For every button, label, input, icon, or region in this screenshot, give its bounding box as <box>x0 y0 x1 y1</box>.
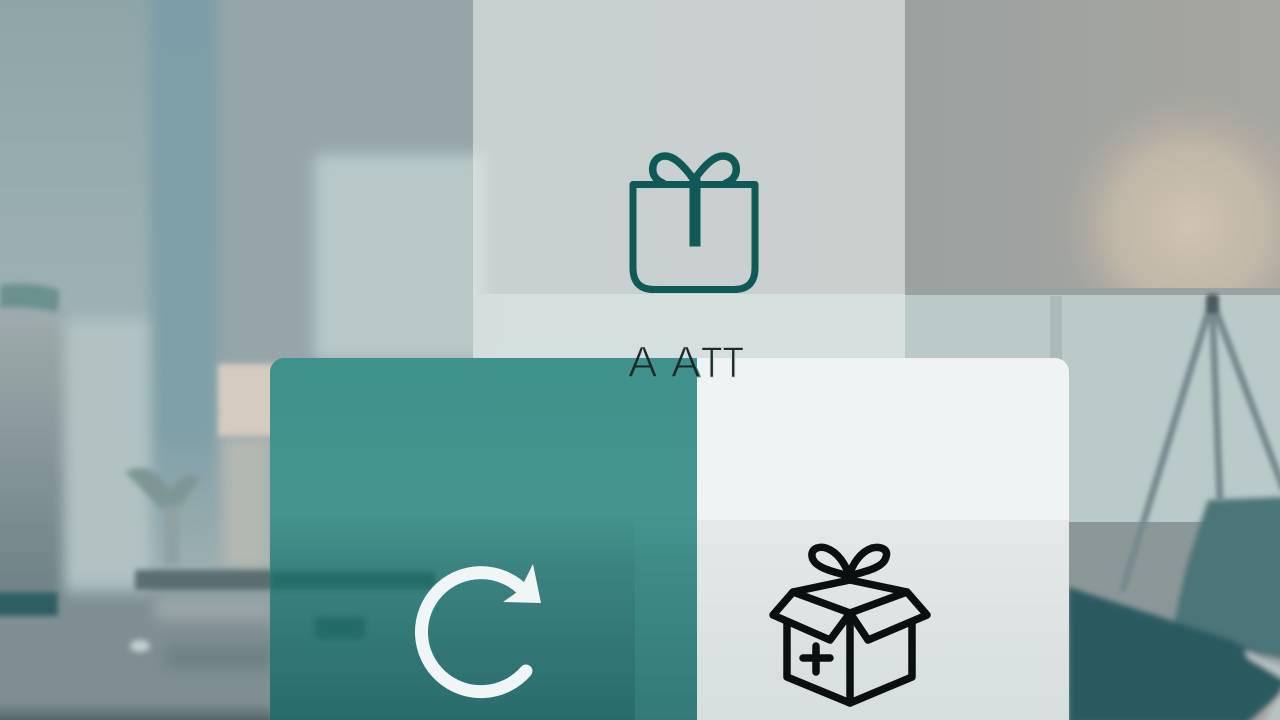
teal panel <box>270 358 697 720</box>
icon: open gift box with plus <box>773 547 927 703</box>
title: A <box>671 338 701 387</box>
lower white panel floor tone <box>697 520 1069 720</box>
title: A <box>628 338 658 387</box>
title <box>628 338 744 387</box>
white panel <box>697 358 1069 520</box>
darker sofa shapes reflected in teal panel <box>270 520 697 720</box>
icon: refresh arrow <box>421 564 541 692</box>
icon: gift outline <box>633 156 755 290</box>
title: TT <box>701 338 744 387</box>
bottom card with teal and white halves <box>270 358 1069 720</box>
top translucent panel <box>473 0 905 358</box>
